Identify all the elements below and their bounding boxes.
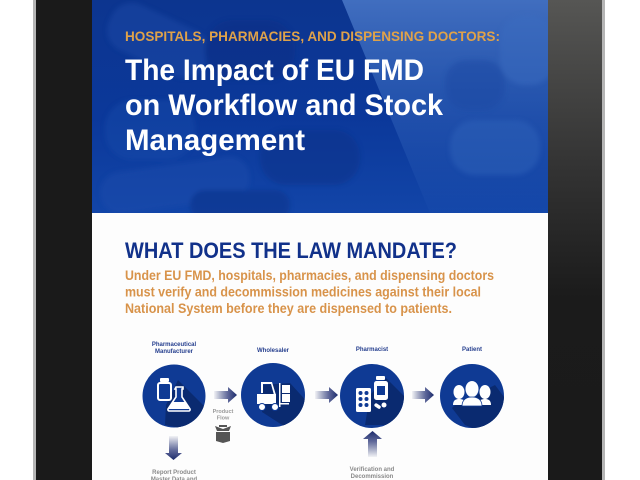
arrow: manufacturer report down — [165, 436, 182, 460]
verification label — [350, 467, 395, 480]
flow labels: Pharmaceutical — [152, 342, 197, 348]
section heading: WHAT DOES THE LAW MANDATE? — [125, 238, 457, 263]
intro paragraph — [125, 267, 494, 316]
screen background — [92, 0, 548, 480]
node: manufacturer icon — [142, 364, 206, 428]
eyebrow heading: HOSPITALS, PHARMACIES, AND DISPENSING DOCTORS: — [125, 28, 500, 44]
main title: on Workflow and Stock — [125, 89, 443, 122]
product flow label — [213, 409, 234, 422]
main title: Management — [125, 124, 305, 157]
verification label: Decommission — [351, 474, 394, 480]
product flow label: Product — [213, 409, 234, 415]
arrow: verification up — [363, 431, 382, 457]
icon: product box — [215, 425, 231, 443]
main title: The Impact of EU FMD — [125, 54, 424, 87]
intro paragraph: National System before they are dispensed to patients. — [125, 300, 452, 316]
flow labels — [152, 342, 482, 355]
intro paragraph: Under EU FMD, hospitals, pharmacies, and dispensing doctors — [125, 267, 494, 283]
arrow: pharmacist to patient — [412, 387, 434, 403]
node: patient icon — [440, 364, 504, 428]
main title — [125, 54, 443, 157]
flow labels: Patient — [462, 347, 482, 353]
report label — [151, 470, 198, 480]
flow labels: Wholesaler — [257, 348, 290, 354]
intro paragraph: must verify and decommission medicines against their local — [125, 284, 481, 300]
flow labels: Manufacturer — [155, 349, 194, 355]
flow labels: Pharmacist — [356, 347, 388, 353]
verification label: Verification and — [350, 467, 395, 473]
arrow: manufacturer to wholesaler — [214, 387, 237, 403]
node: wholesaler forklift icon — [241, 363, 305, 427]
product flow label: Flow — [217, 416, 230, 422]
hero banner — [92, 0, 555, 220]
node: pharmacist icon — [340, 364, 410, 428]
arrow: wholesaler to pharmacist — [315, 387, 338, 403]
report label: Report Product — [152, 470, 196, 476]
